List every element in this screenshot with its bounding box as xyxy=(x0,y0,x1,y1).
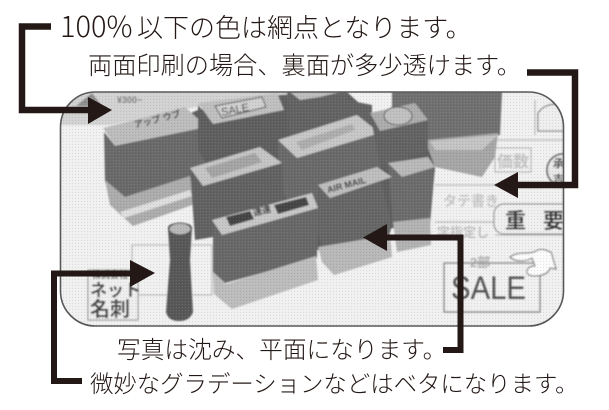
text: line 1: 100% xyxy=(60,4,133,46)
stamp: small round xyxy=(370,102,428,148)
stamp: AIR MAIL xyxy=(316,167,392,275)
stamp: Upper left xyxy=(103,107,208,226)
label: 重要: 要 xyxy=(543,210,564,233)
seal: round stamp xyxy=(545,152,563,182)
text: line 1: 以下の色は網点となります。 xyxy=(137,13,472,43)
background label 指定: 字指定し xyxy=(437,225,489,240)
stamp: long right xyxy=(278,114,380,201)
seal: round stamp: 吉 xyxy=(553,172,564,186)
text: line 4: 微妙なグラデーションなどはベタになります。 xyxy=(90,371,578,397)
photo background band xyxy=(60,92,300,125)
stamp: back centre xyxy=(286,92,373,114)
label: SALE box xyxy=(444,263,540,312)
arrow: right to photo xyxy=(494,72,575,198)
stamp: cylinder xyxy=(166,223,193,321)
stamp: far back tall xyxy=(392,92,502,177)
label: ネット名刺: ネット xyxy=(90,281,141,300)
label: ネット名刺: 株式会社 xyxy=(92,269,128,280)
background label 2部: 2部 xyxy=(470,255,490,270)
text: line 2: 両面印刷の場合、裏面が多少透けます。 xyxy=(88,53,521,80)
arrow: top left to photo xyxy=(22,26,112,124)
stamp: address xyxy=(190,147,285,240)
background form lines and boxes xyxy=(132,100,564,295)
stamp: AIR MAIL: AIR MAIL xyxy=(326,175,368,195)
stamp: front 速達 xyxy=(212,193,318,309)
sketch: hand and bird xyxy=(510,249,556,276)
label: ネット名刺: 名刺 xyxy=(90,298,130,321)
stamp: small right xyxy=(388,157,435,252)
label: 重要: 重 xyxy=(505,210,526,233)
stamp: SALE xyxy=(198,93,285,170)
stamp: SALE: SALE xyxy=(220,102,250,119)
stamp: Upper left: アップ ウブ xyxy=(133,108,182,130)
label: 重要 xyxy=(492,202,563,236)
seal: round stamp: 承 xyxy=(553,157,564,170)
panel: halftone stamp photograph xyxy=(60,92,584,326)
label: ネット名刺 xyxy=(88,269,141,321)
label: SALE box: SALE xyxy=(451,270,526,306)
seal: arch xyxy=(538,104,566,131)
photo border xyxy=(60,92,564,326)
corner shape xyxy=(76,93,102,106)
background label 価数: 価数 xyxy=(497,153,529,171)
price label: ¥300− xyxy=(117,95,142,105)
background label タテ書き: タテ書き xyxy=(443,193,499,209)
arrow: bottom centre to stamp xyxy=(363,224,460,350)
dark mass behind stamps xyxy=(115,92,435,250)
arrow: bottom left to cylinder xyxy=(54,260,155,381)
stamp: front 速達: 速達 xyxy=(252,203,272,218)
text: line 3: 写真は沈み、平面になります。 xyxy=(117,337,446,364)
halftone texture xyxy=(60,92,564,326)
